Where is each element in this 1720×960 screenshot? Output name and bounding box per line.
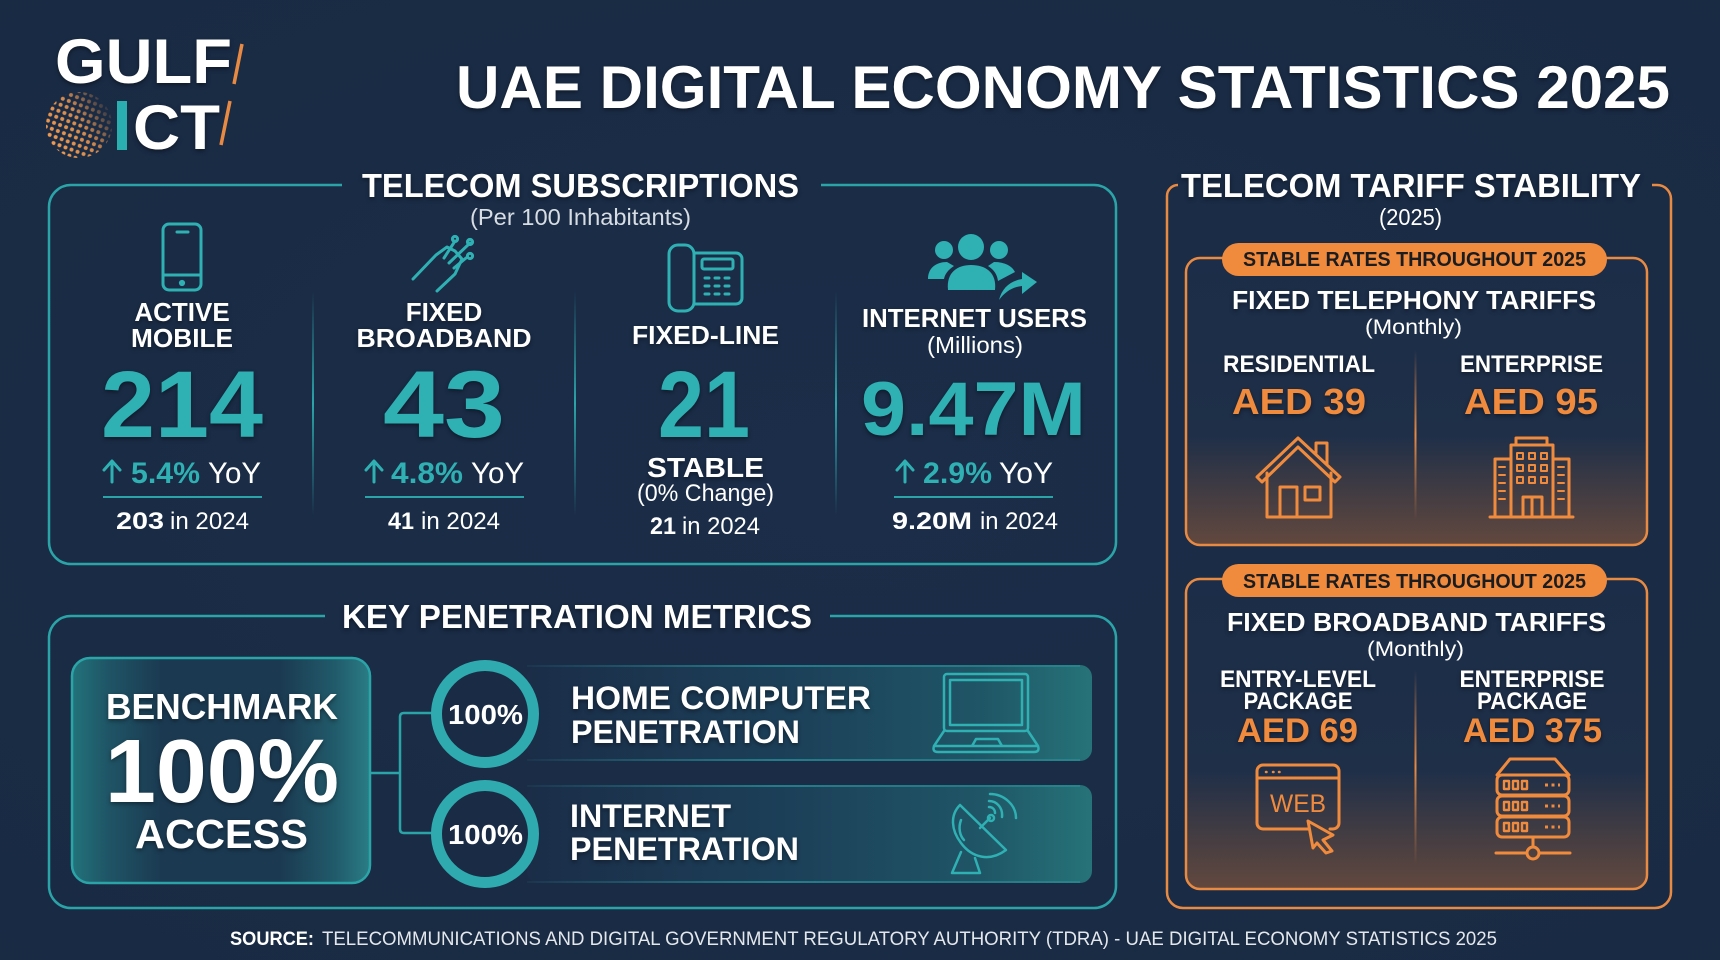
web label: WEB: [1270, 790, 1326, 818]
sub-panel: fixed telephony tariffs: [1186, 243, 1647, 545]
pill text: STABLE RATES THROUGHOUT 2025: [1243, 571, 1586, 593]
yoy: YoY: [208, 457, 261, 490]
bar label: PENETRATION: [571, 714, 800, 750]
prior year: 41: [388, 508, 414, 535]
panel: telecom tariff stability: [1167, 167, 1671, 908]
bar: internet penetration: [436, 785, 1092, 883]
prior year: in 2024: [421, 508, 500, 535]
prior year: in 2024: [170, 508, 249, 535]
pill text: STABLE RATES THROUGHOUT 2025: [1243, 249, 1586, 271]
benchmark footer: ACCESS: [135, 811, 308, 857]
label: BROADBAND: [356, 323, 532, 353]
label: FIXED: [406, 297, 482, 327]
connector: [370, 713, 432, 833]
heading: TELECOM TARIFF STABILITY: [1181, 167, 1641, 204]
label: FIXED-LINE: [632, 320, 779, 350]
logo word: GULF: GULF: [55, 27, 232, 97]
tier: residential: RESIDENTIAL: [1223, 351, 1375, 378]
bar label: HOME COMPUTER: [571, 680, 871, 716]
change: 4.8%: [391, 457, 463, 490]
panel outline: [1167, 185, 1671, 908]
benchmark label: BENCHMARK: [106, 686, 338, 727]
arrow up: [104, 461, 120, 482]
value: 21: [658, 352, 750, 458]
logo bar: I: [117, 101, 127, 150]
price: AED 95: [1464, 381, 1598, 422]
pill: [1222, 564, 1607, 597]
change: (0% Change): [637, 480, 774, 507]
bar label: INTERNET: [570, 798, 731, 834]
logo slash: bottom: [221, 101, 230, 145]
unit: (Millions): [927, 332, 1023, 358]
label: ACTIVE: [134, 297, 230, 327]
icon: house: [1257, 438, 1340, 517]
pill: [1222, 243, 1607, 276]
bar: home computer penetration: [436, 665, 1092, 762]
value: 43: [383, 352, 505, 458]
sub-panel: fixed broadband tariffs: [1186, 564, 1647, 889]
source text: TELECOMMUNICATIONS AND DIGITAL GOVERNMENT REGULATORY AUTHORITY (TDRA) - UAE DIGITAL ECONOMY STATISTICS 2025: [322, 929, 1497, 950]
benchmark value: 100%: [105, 722, 339, 822]
icon: smartphone: [163, 224, 201, 290]
icon: office building: [1490, 438, 1573, 517]
unit: (Monthly): [1367, 638, 1464, 661]
unit: (Monthly): [1365, 316, 1462, 339]
change: 5.4%: [131, 457, 200, 490]
subheading: (2025): [1379, 204, 1442, 230]
benchmark card: [72, 658, 370, 883]
column: fixed broadband: [356, 236, 532, 535]
icon: people and arrow: [928, 234, 1037, 300]
value: 214: [101, 352, 263, 458]
panel outline: [49, 616, 1116, 908]
subheading: (Per 100 Inhabitants): [470, 204, 691, 230]
title: UAE DIGITAL ECONOMY STATISTICS 2025: [456, 54, 1670, 121]
tier: enterprise package: ENTERPRISE: [1460, 666, 1604, 693]
heading: FIXED BROADBAND TARIFFS: [1227, 607, 1606, 637]
arrow up: [366, 461, 382, 482]
icon: satellite dish: [952, 794, 1016, 873]
heading: KEY PENETRATION METRICS: [342, 598, 812, 635]
value: 9.47M: [861, 367, 1086, 452]
label: INTERNET USERS: [862, 303, 1087, 333]
panel: key penetration metrics: [49, 598, 1116, 908]
column: active mobile: [101, 224, 263, 535]
tier: entry-level package: PACKAGE: [1244, 688, 1352, 715]
prior year: in 2024: [980, 508, 1058, 535]
price: AED 69: [1237, 712, 1358, 750]
change: 2.9%: [923, 457, 992, 490]
price: AED 375: [1463, 712, 1602, 750]
ring value: 100%: [448, 819, 523, 850]
panel outline: [49, 185, 1116, 564]
tier: entry-level package: ENTRY-LEVEL: [1220, 666, 1376, 693]
icon: desk telephone: [669, 245, 742, 311]
icon: web browser: [1257, 765, 1339, 853]
logo word: CT: CT: [133, 93, 220, 163]
logo globe: [46, 92, 112, 158]
ring: 100%: [436, 666, 534, 762]
label: MOBILE: [131, 323, 233, 353]
column: fixed-line: [632, 245, 779, 540]
prior year: 203: [116, 508, 164, 535]
icon: laptop: [934, 674, 1038, 752]
price: AED 39: [1232, 381, 1366, 422]
prior year: 21: [650, 513, 676, 540]
logo slash: top: [234, 44, 242, 84]
heading: TELECOM SUBSCRIPTIONS: [362, 167, 799, 204]
tier: enterprise: ENTERPRISE: [1460, 351, 1603, 378]
bar label: PENETRATION: [570, 831, 799, 867]
tier: enterprise package: PACKAGE: [1477, 688, 1587, 715]
heading: FIXED TELEPHONY TARIFFS: [1232, 285, 1596, 315]
prior year: 9.20M: [892, 508, 972, 535]
prior year: in 2024: [682, 513, 760, 540]
ring value: 100%: [448, 699, 523, 730]
column: internet users: [861, 234, 1087, 535]
icon: server: [1496, 759, 1570, 859]
yoy: YoY: [471, 457, 524, 490]
icon: fibre optic: [413, 236, 473, 291]
yoy: YoY: [999, 457, 1053, 490]
ring: 100%: [436, 786, 534, 882]
logo: Gulf ICT: [46, 38, 244, 158]
status: STABLE: [647, 452, 764, 483]
source label: SOURCE:: [230, 929, 314, 950]
arrow up: [897, 461, 913, 482]
source footer: [230, 929, 1497, 950]
panel: telecom subscriptions: [49, 167, 1116, 564]
